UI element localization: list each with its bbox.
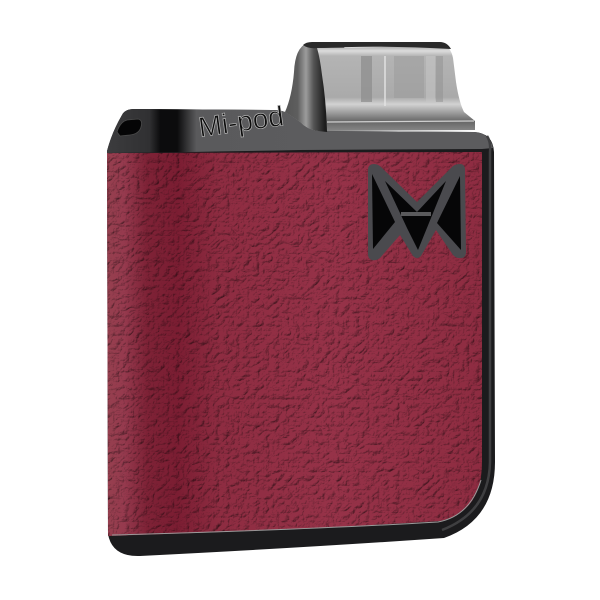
pod vertical bands: [361, 56, 443, 106]
leather panel: [105, 148, 485, 540]
logo left void: [372, 174, 395, 249]
leather creases: [105, 148, 485, 540]
logo inner grille: [401, 212, 431, 216]
logo centre void: [385, 181, 446, 250]
air intake slot: [117, 119, 142, 136]
right frame highlight: [442, 136, 490, 530]
pod clear window: [317, 46, 475, 131]
logo right void: [437, 176, 461, 250]
M logo vent: [368, 164, 466, 260]
pod cartridge: [285, 42, 475, 132]
pod top rim: [303, 42, 451, 49]
pod lower band: [327, 121, 474, 122]
brand text: Mi-pod: [197, 100, 286, 143]
pod smoke side: [285, 43, 345, 132]
logo outer shape: [368, 164, 466, 260]
device body frame: [107, 109, 495, 556]
bottom edge highlight: [112, 480, 481, 535]
top plate: [107, 109, 493, 153]
illustration: Mi-Pod device: [107, 42, 495, 556]
